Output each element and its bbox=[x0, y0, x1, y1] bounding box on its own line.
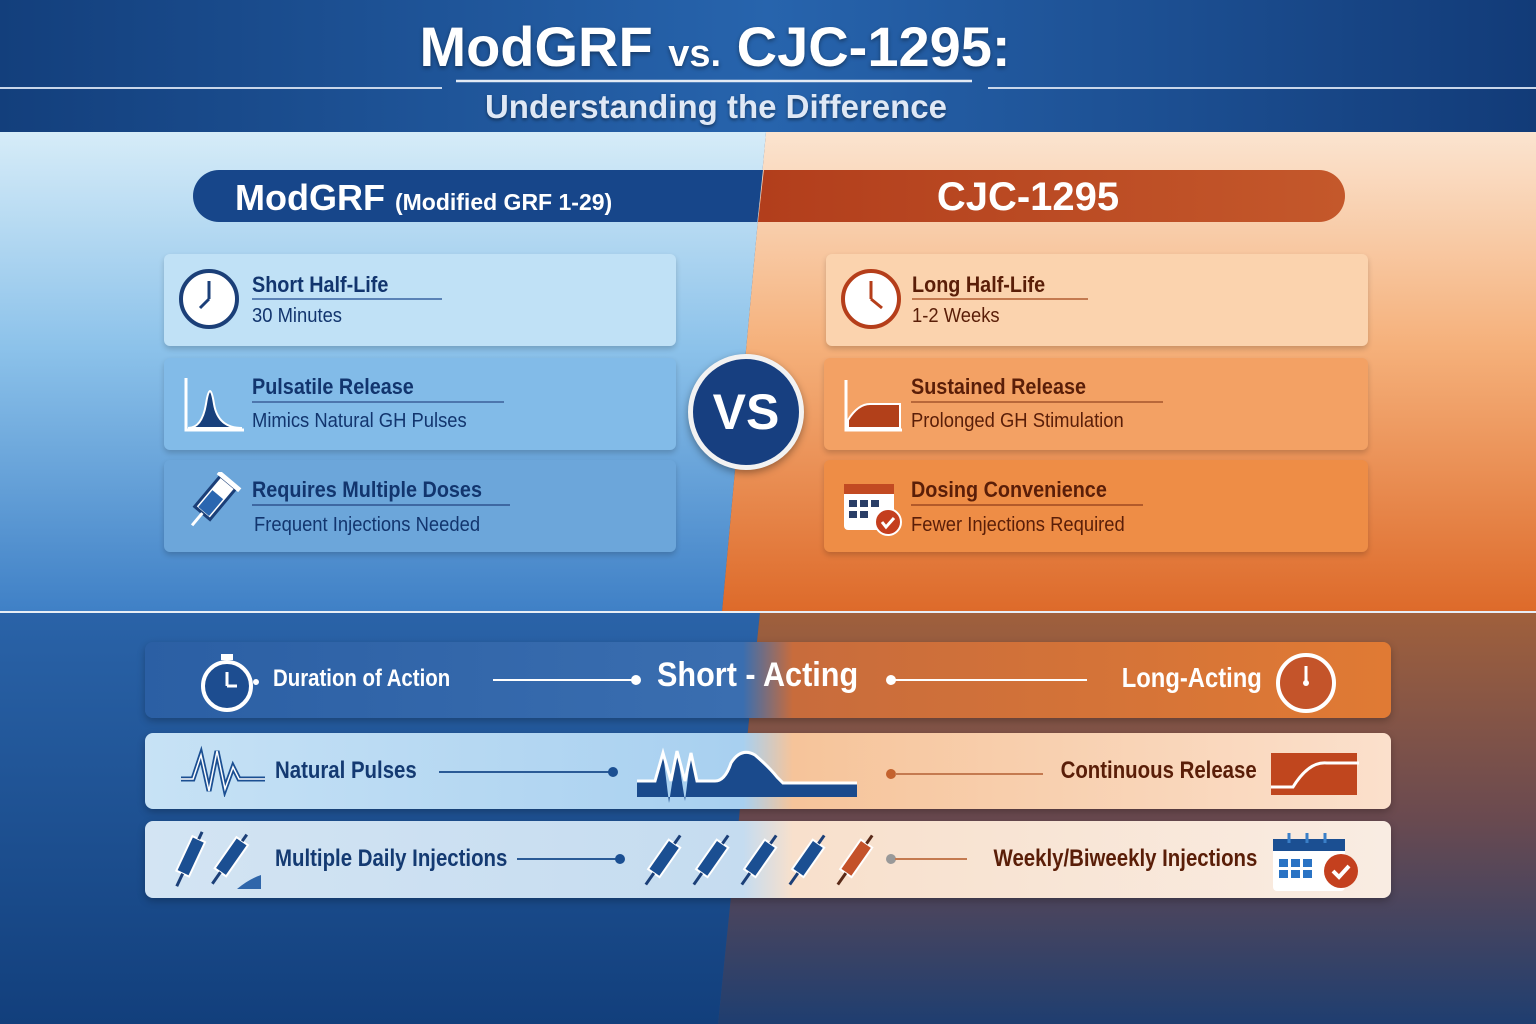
icon: calendar bbox=[1273, 833, 1358, 891]
icon: syringes blue bbox=[175, 831, 261, 889]
VS badge: VS bbox=[713, 384, 779, 440]
subtitle: Understanding the Difference bbox=[485, 88, 947, 125]
row: duration of action: Short - Acting bbox=[657, 656, 858, 694]
card: dosing convenience: Dosing Convenience bbox=[911, 477, 1107, 502]
row: duration of action: Duration of Action bbox=[273, 665, 450, 692]
icon: pulse graph bbox=[184, 378, 244, 432]
icon: sustained graph bbox=[844, 380, 902, 432]
icon: row of syringes bbox=[644, 834, 874, 886]
card: multiple doses bbox=[164, 460, 676, 552]
icon: orange clock bbox=[1276, 653, 1336, 713]
header: CJC-1295: CJC-1295 bbox=[937, 175, 1119, 219]
row: duration of action: Long-Acting bbox=[1122, 662, 1262, 693]
card: short half-life bbox=[164, 254, 676, 346]
card: multiple doses: Frequent Injections Needed bbox=[254, 514, 480, 536]
card: short half-life: 30 Minutes bbox=[252, 305, 342, 327]
row: natural pulses bbox=[145, 733, 1391, 809]
card: short half-life: Short Half-Life bbox=[252, 272, 388, 297]
chart: pulses to sustained bbox=[637, 748, 857, 803]
icon: pulse wave bbox=[181, 746, 265, 797]
card: sustained release: Sustained Release bbox=[911, 374, 1086, 399]
card: pulsatile release: Mimics Natural GH Pulses bbox=[252, 410, 467, 432]
title: ModGRF vs. CJC-1295: bbox=[419, 15, 1011, 78]
row: natural pulses: Natural Pulses bbox=[275, 757, 417, 784]
row: injections: Multiple Daily Injections bbox=[275, 845, 507, 872]
icon: clock bbox=[179, 269, 239, 329]
icon: stopwatch bbox=[201, 654, 259, 712]
header: ModGRF bbox=[193, 170, 763, 222]
icon: clock orange bbox=[841, 269, 901, 329]
row: natural pulses: Continuous Release bbox=[1061, 757, 1257, 784]
card: pulsatile release bbox=[164, 358, 676, 450]
card: multiple doses: Requires Multiple Doses bbox=[252, 477, 482, 502]
icon: continuous release bbox=[1271, 753, 1359, 795]
icon: syringe bbox=[191, 472, 242, 526]
row: duration of action bbox=[145, 642, 1391, 718]
VS badge bbox=[688, 354, 804, 470]
header: CJC-1295 bbox=[758, 170, 1345, 222]
card: long half-life bbox=[826, 254, 1368, 346]
card: dosing convenience bbox=[824, 460, 1368, 552]
card: sustained release: Prolonged GH Stimulation bbox=[911, 410, 1124, 432]
card: dosing convenience: Fewer Injections Required bbox=[911, 514, 1125, 536]
card: pulsatile release: Pulsatile Release bbox=[252, 374, 414, 399]
row: injections: Weekly/Biweekly Injections bbox=[993, 845, 1257, 872]
row: injections bbox=[145, 821, 1391, 898]
card: long half-life: Long Half-Life bbox=[912, 272, 1045, 297]
card: sustained release bbox=[824, 358, 1368, 450]
card: long half-life: 1-2 Weeks bbox=[912, 305, 1000, 327]
header: ModGRF: ModGRF (Modified GRF 1-29) bbox=[235, 177, 612, 218]
icon: calendar check bbox=[844, 484, 902, 536]
